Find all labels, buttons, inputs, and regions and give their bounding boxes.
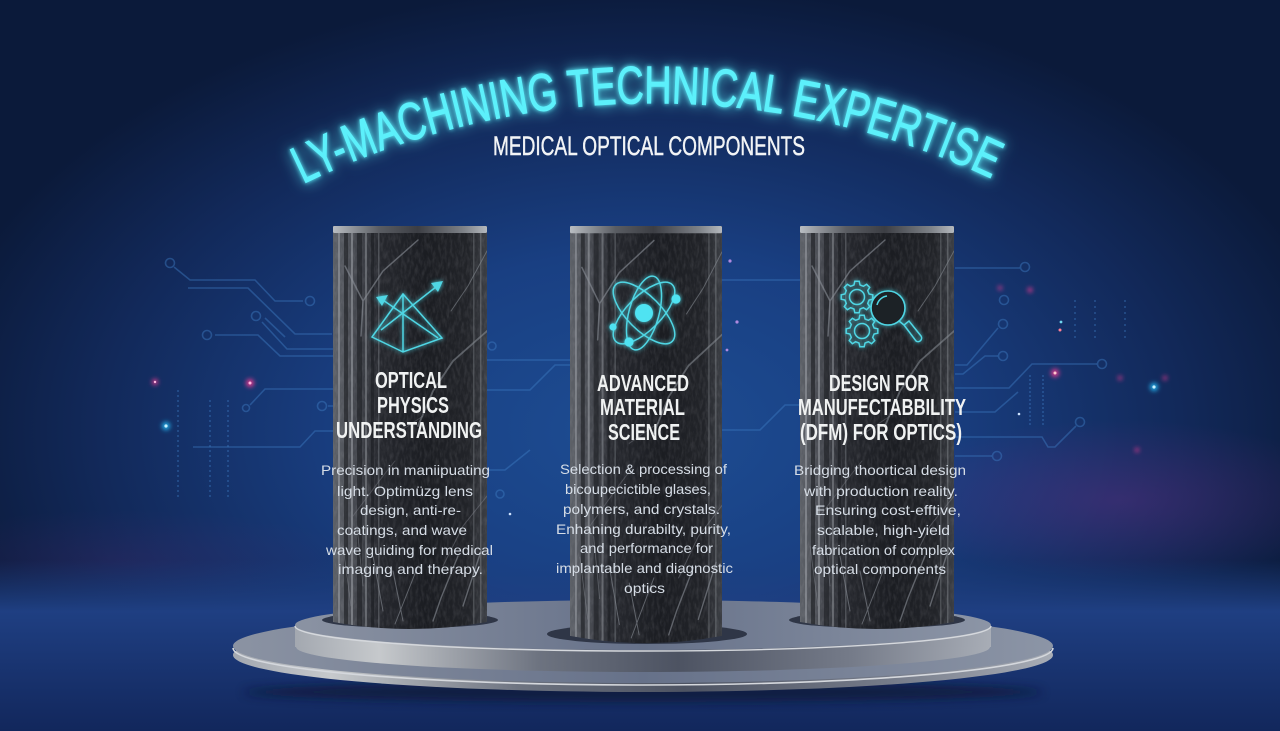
heading: optical physics understanding: OPTICAL — [375, 367, 447, 393]
panel: design for manufacturability column — [794, 226, 966, 636]
text block: advanced material description: bicoupecictible glases, — [565, 481, 711, 497]
text block: advanced material description: optics — [624, 580, 665, 596]
icon: gears and magnifier — [841, 281, 922, 347]
text block: design for manufacturability description: with production reality. — [803, 483, 958, 499]
heading: advanced material science: SCIENCE — [608, 419, 680, 445]
circuit traces: left — [166, 258, 333, 500]
circuit traces: right — [955, 262, 1125, 460]
text block: optical physics description: imaging and therapy. — [338, 561, 483, 577]
heading: design for manufacturability: MANUFECTABBILITY — [798, 394, 966, 420]
text block: advanced material description: polymers, and crystals. — [563, 501, 720, 517]
text block: advanced material description: and performance for — [580, 540, 713, 556]
title: LY-Machining Technical Expertise: LY-MACHINING TECHNICAL EXPERTISE — [282, 56, 1012, 191]
text block: optical physics description: Precision in maniipuating — [321, 462, 490, 478]
panel: advanced material column — [556, 226, 733, 650]
circuit traces: centre gaps — [487, 280, 800, 498]
text block: optical physics description: design, anti-re- — [360, 502, 461, 518]
heading: optical physics understanding: PHYSICS — [377, 392, 449, 418]
column body — [800, 226, 954, 636]
heading: advanced material science: MATERIAL — [600, 394, 685, 420]
text block: optical physics description: coatings, and wave — [337, 522, 467, 538]
text block: design for manufacturability description: Bridging thoortical design — [794, 462, 966, 478]
heading: optical physics understanding: UNDERSTANDING — [336, 417, 482, 443]
platform — [233, 600, 1053, 702]
text block: design for manufacturability description: Ensuring cost-efftive, — [815, 502, 961, 518]
text block: optical physics description: wave guiding for medical — [325, 542, 493, 558]
text block: design for manufacturability description: fabrication of complex — [812, 542, 955, 558]
text block: advanced material description — [556, 461, 733, 596]
heading: advanced material science — [597, 370, 689, 445]
text block: optical physics description: light. Optimüzg lens — [337, 483, 473, 499]
column body — [570, 226, 722, 650]
text block: design for manufacturability description: scalable, high-yield — [817, 522, 950, 538]
heading: advanced material science: ADVANCED — [597, 370, 689, 396]
text block: design for manufacturability description — [794, 462, 966, 577]
heading: optical physics understanding — [336, 367, 482, 443]
glowing particles — [152, 259, 1167, 515]
icon: atom — [604, 272, 684, 354]
platform sockets — [322, 612, 965, 644]
heading: design for manufacturability — [798, 370, 966, 445]
column body — [333, 226, 487, 636]
text block: advanced material description: Selection & processing of — [560, 461, 727, 477]
panel: optical physics column — [321, 226, 493, 636]
icon: prism with light rays — [372, 281, 443, 352]
text block: advanced material description: implantable and diagnostic — [556, 560, 733, 576]
heading: design for manufacturability: DESIGN FOR — [829, 370, 929, 396]
text block: design for manufacturability description: optical components — [814, 561, 946, 577]
text block: advanced material description: Enhaning durabilty, purity, — [556, 521, 731, 537]
subtitle: MEDICAL OPTICAL COMPONENTS — [493, 131, 805, 161]
text block: optical physics description — [321, 462, 493, 577]
heading: design for manufacturability: (DFM) FOR OPTICS) — [800, 419, 962, 445]
